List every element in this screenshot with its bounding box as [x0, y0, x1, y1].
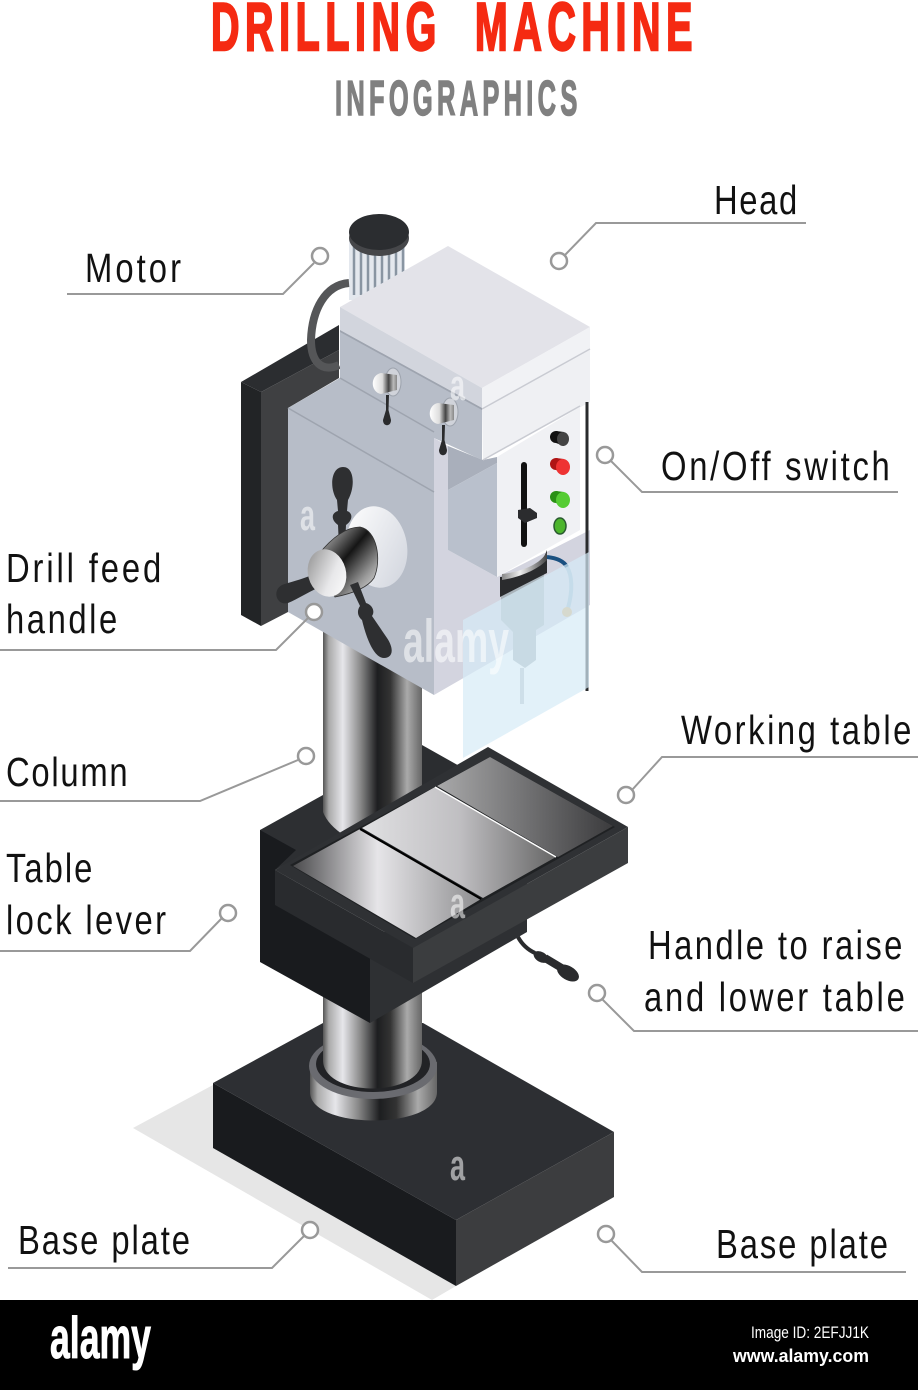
label: Table lock lever: Table: [6, 844, 92, 891]
label: Handle to raise and lower table: Handle to raise: [648, 921, 902, 968]
subtitle: INFOGRAPHICS: [335, 72, 577, 126]
upper column: [323, 620, 422, 836]
watermarks: a: [300, 491, 315, 540]
label: Head: Head: [714, 176, 797, 223]
label: Drill feed handle: [0, 544, 322, 650]
label: Motor: [67, 244, 328, 294]
drill feed handle: [276, 467, 414, 658]
label: Base plate right: Base plate: [716, 1220, 888, 1267]
lower column: [323, 990, 422, 1088]
working table: [275, 747, 628, 983]
label: Head: [551, 176, 806, 269]
label: Working table: Working table: [681, 706, 911, 753]
floor shadow: [133, 1085, 456, 1300]
label: Working table: [618, 706, 918, 803]
motor hose: [311, 283, 349, 368]
label: Drill feed handle: handle: [6, 595, 117, 642]
red button: [550, 458, 570, 475]
label: Table lock lever: lock lever: [6, 896, 166, 943]
head body lower right: [434, 438, 590, 695]
watermarks: a: [450, 879, 465, 928]
base plate: [213, 1023, 614, 1286]
footer logo: alamy: [50, 1306, 151, 1371]
footer bar: [0, 1300, 918, 1390]
black button: [550, 431, 569, 446]
small knob right: [430, 398, 458, 455]
image id: Image ID: 2EFJJ1K: [751, 1323, 870, 1342]
label: Handle to raise and lower table: [589, 921, 918, 1031]
head top cover: [340, 246, 590, 460]
watermarks: a: [450, 1141, 465, 1190]
label: Drill feed handle: Drill feed: [6, 544, 161, 591]
table plate middle: [362, 787, 556, 898]
switch slot: [521, 462, 527, 547]
label: Motor: Motor: [85, 244, 181, 291]
left lever: [276, 575, 318, 603]
column collar: [309, 1033, 437, 1120]
table plate right: [437, 757, 613, 857]
label: Column: [0, 748, 314, 801]
switch slider: [518, 508, 537, 523]
label: Column: Column: [6, 748, 128, 795]
flange: [340, 501, 414, 593]
head body left face: [288, 330, 482, 695]
watermarks: [300, 361, 509, 1190]
label: Table lock lever: [0, 844, 236, 951]
hub front: [302, 545, 352, 601]
lower lever: [350, 582, 392, 658]
small knob left: [373, 368, 401, 425]
control panel: [483, 402, 587, 691]
watermarks: a: [450, 361, 465, 410]
glass guard: [463, 552, 589, 758]
label: On/Off switch: On/Off switch: [661, 442, 890, 489]
chuck and drill: [500, 550, 572, 704]
motor: [349, 214, 409, 300]
label: Handle to raise and lower table: and lower table: [644, 973, 905, 1020]
green button: [550, 491, 570, 508]
hub: [318, 527, 378, 597]
back column plate: [241, 325, 339, 626]
label: Base plate right: [598, 1220, 906, 1272]
site url: www.alamy.com: [732, 1346, 869, 1366]
label: Base plate left: Base plate: [18, 1216, 190, 1263]
watermarks: alamy: [403, 608, 509, 675]
table bracket: [260, 745, 527, 1023]
table raise handle: [518, 937, 582, 985]
table plate left: [293, 829, 481, 938]
top lever: [332, 467, 353, 547]
label: Base plate left: [8, 1216, 318, 1268]
green flat button: [554, 518, 566, 534]
